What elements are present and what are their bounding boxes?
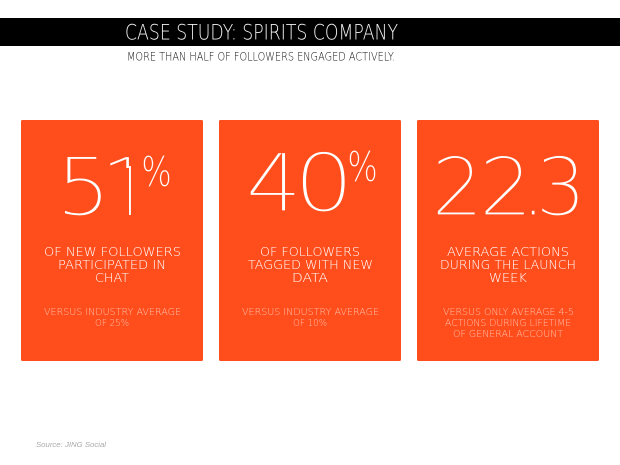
stat: 40% bbox=[246, 137, 378, 230]
stat: 51% bbox=[56, 141, 172, 234]
label: average actions bbox=[440, 245, 576, 285]
label: tagged followers: DATA bbox=[292, 271, 328, 285]
comparison note: ACTIONS DURING LIFETIME bbox=[445, 318, 571, 329]
comparison note bbox=[443, 307, 574, 340]
label: new followers: OF NEW FOLLOWERS bbox=[44, 245, 181, 259]
stat: 22.3: . bbox=[520, 141, 546, 234]
stat: 22.3: 2 bbox=[432, 141, 484, 234]
comparison note: VERSUS ONLY AVERAGE 4-5 bbox=[443, 307, 574, 318]
label: average actions: WEEK bbox=[489, 271, 527, 285]
panel: 22.3 actions bbox=[417, 120, 599, 361]
panel: 51 percent bbox=[21, 120, 203, 361]
comparison note: VERSUS INDUSTRY AVERAGE bbox=[44, 307, 181, 318]
source note: Source: JING Social bbox=[36, 440, 106, 449]
label: tagged followers: OF FOLLOWERS bbox=[260, 245, 360, 259]
label: average actions: AVERAGE ACTIONS bbox=[447, 245, 569, 259]
stat: 22.3 bbox=[432, 141, 586, 234]
stat: 22.3: 2 bbox=[479, 141, 533, 234]
label: new followers: PARTICIPATED IN bbox=[58, 258, 166, 272]
stat: 40%: 4 bbox=[246, 137, 302, 230]
panel: 40 percent bbox=[219, 120, 401, 361]
stat: 40%: 0 bbox=[294, 137, 354, 230]
stat: 51%: % bbox=[141, 148, 172, 196]
comparison note bbox=[242, 307, 379, 329]
label: tagged followers: TAGGED WITH NEW bbox=[248, 258, 373, 272]
comparison note: VERSUS INDUSTRY AVERAGE bbox=[242, 307, 379, 318]
title banner: CASE STUDY: SPIRITS COMPANY bbox=[125, 20, 398, 44]
title banner bbox=[0, 18, 620, 46]
subtitle: MORE THAN HALF OF FOLLOWERS ENGAGED ACTIVELY. bbox=[127, 50, 395, 64]
label: tagged followers bbox=[248, 245, 373, 285]
stat: 40%: % bbox=[347, 143, 378, 191]
stat: 51%: 1 bbox=[101, 141, 152, 234]
comparison note: OF 10% bbox=[293, 318, 327, 329]
stat: 22.3: 3 bbox=[536, 141, 586, 234]
label: new followers: CHAT bbox=[95, 271, 129, 285]
label: new followers bbox=[44, 245, 181, 285]
stat: 51%: 5 bbox=[56, 141, 111, 234]
comparison note: OF GENERAL ACCOUNT bbox=[453, 329, 563, 340]
label: average actions: DURING THE LAUNCH bbox=[440, 258, 576, 272]
comparison note: OF 25% bbox=[95, 318, 129, 329]
comparison note bbox=[44, 307, 181, 329]
